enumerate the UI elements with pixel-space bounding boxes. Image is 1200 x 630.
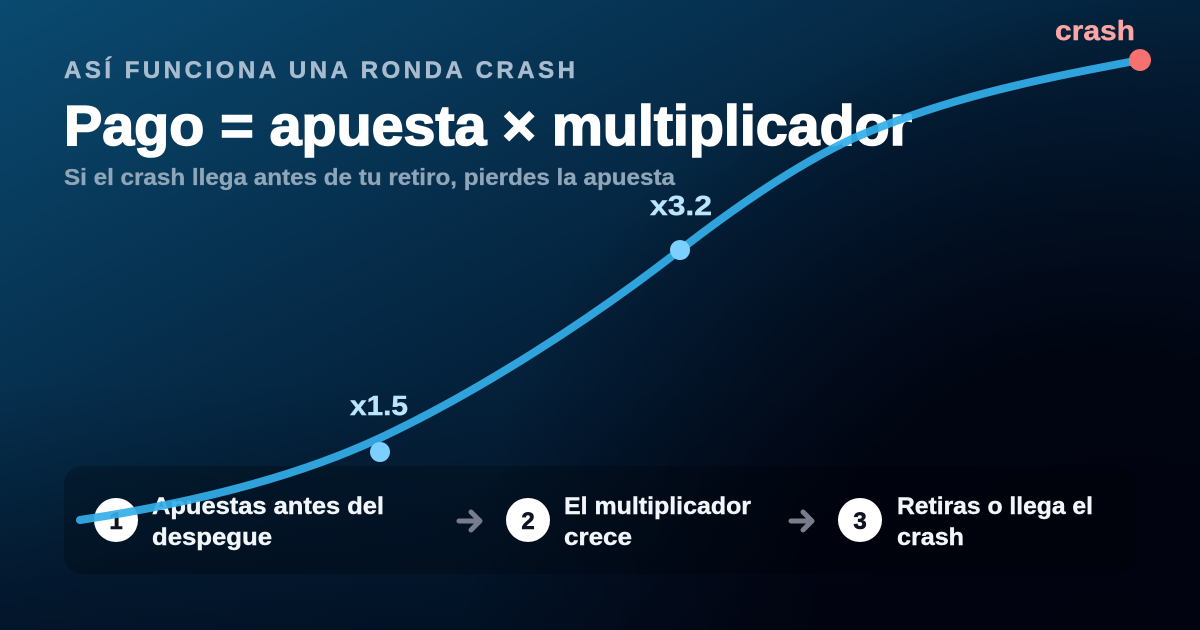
point crash: crash (1055, 15, 1135, 46)
point x3.2: x3.2 (650, 190, 712, 221)
step 1 (94, 493, 384, 551)
step 2: El multiplicador (564, 493, 751, 520)
step 2: 2 (521, 508, 535, 535)
panel: steps (64, 466, 1136, 574)
point x1.5: x1.5 (350, 390, 408, 421)
point x3.2 (650, 190, 712, 260)
step 3: Retiras o llega el (897, 493, 1093, 520)
step 1: Apuestas antes del (152, 493, 384, 520)
arrow 2 (791, 512, 812, 530)
step 3: 3 (853, 508, 867, 535)
eyebrow: ASÍ FUNCIONA UNA RONDA CRASH (64, 56, 575, 84)
step 2 (506, 493, 751, 551)
step 1: despegue (152, 524, 272, 551)
step 1: 1 (109, 508, 123, 535)
step 3: crash (897, 524, 964, 551)
title: Pago = apuesta × multiplicador (64, 94, 912, 158)
subtitle: Si el crash llega antes de tu retiro, pierdes la apuesta (64, 164, 675, 190)
arrow 1 (459, 512, 480, 530)
step 3 (838, 493, 1093, 551)
step 2: crece (564, 524, 632, 551)
point crash (1055, 15, 1151, 71)
growth curve (80, 60, 1140, 520)
point x1.5 (350, 390, 408, 462)
